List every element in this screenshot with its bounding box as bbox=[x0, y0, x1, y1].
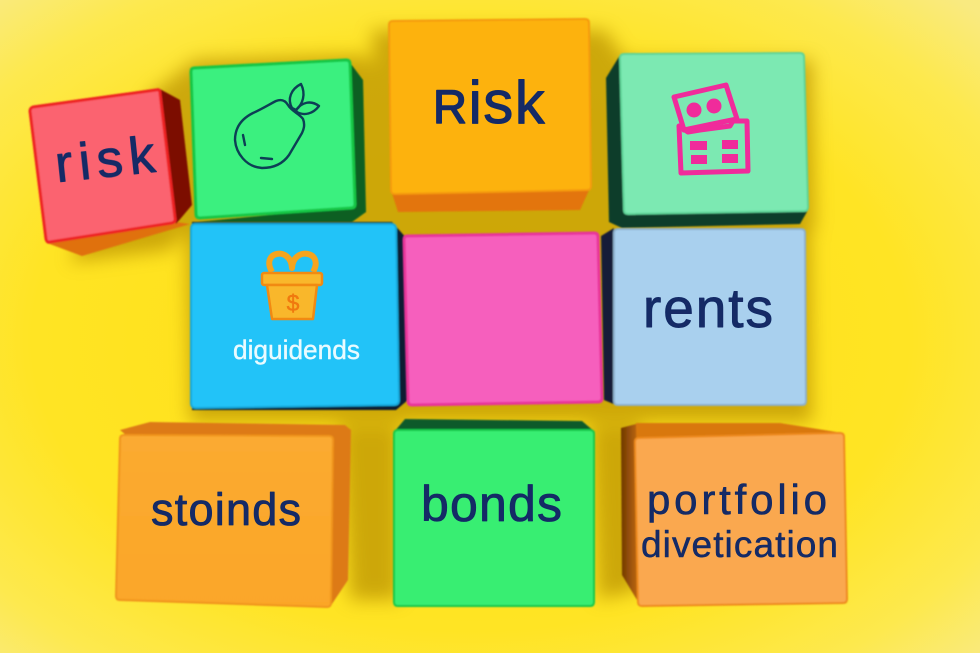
block shadows bbox=[70, 30, 815, 600]
block: blue dividends bbox=[191, 222, 408, 410]
label: portfolio divetication: divetication bbox=[641, 524, 838, 565]
icon: dollar gift basket bbox=[262, 254, 322, 319]
block: pink blank bbox=[404, 233, 602, 405]
label: bonds: bonds bbox=[421, 476, 562, 532]
block: red risk bbox=[30, 88, 192, 256]
icon: dollar gift basket: $ bbox=[287, 290, 300, 316]
block: mint icon bbox=[606, 53, 808, 228]
block: green pear bbox=[191, 60, 366, 222]
label: rIsk: Risk bbox=[433, 69, 546, 136]
label: rents: rents bbox=[643, 277, 773, 339]
block: orange stoinds bbox=[116, 422, 351, 607]
label: risk: risk bbox=[52, 126, 159, 194]
icon: cards with pink outline bbox=[674, 85, 748, 173]
icon: pear bbox=[235, 84, 319, 168]
label: diguidends: diguidends bbox=[233, 335, 360, 365]
label: portfolio divetication: portfolio bbox=[647, 476, 827, 523]
label: stoinds: stoinds bbox=[151, 484, 301, 535]
label: portfolio divetication bbox=[641, 476, 838, 565]
block: light blue rents bbox=[601, 228, 806, 405]
block: green bonds bbox=[394, 419, 595, 606]
block: orange risk bbox=[389, 19, 591, 212]
block: orange portfolio bbox=[621, 423, 847, 606]
